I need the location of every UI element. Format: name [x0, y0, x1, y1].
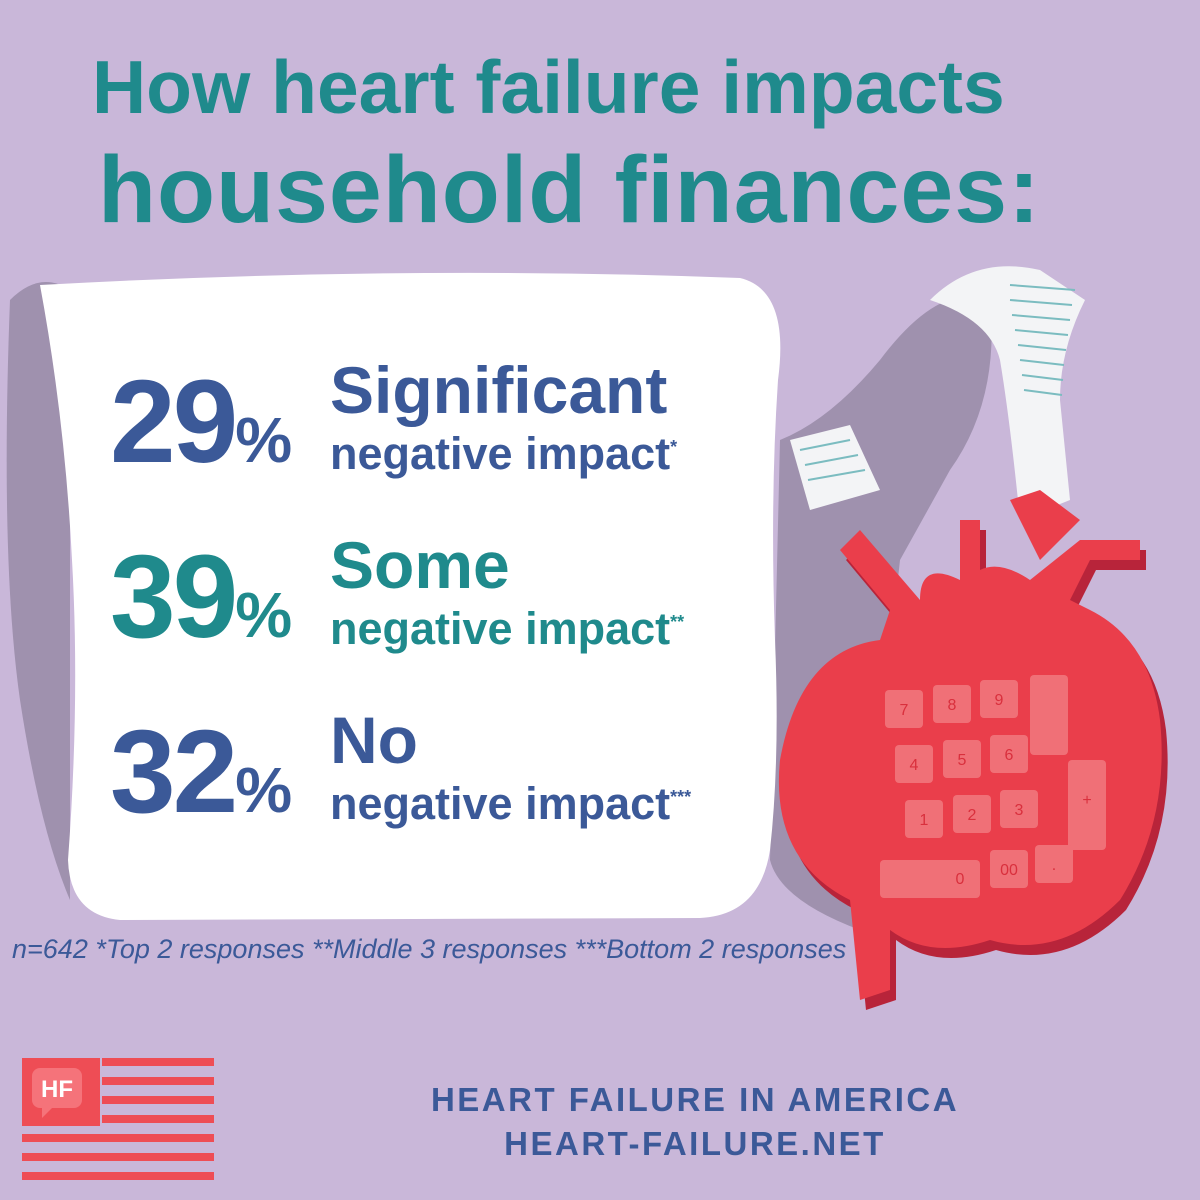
stat: 29%: Significant — [330, 353, 667, 427]
stat: 29% — [110, 353, 678, 488]
icon: heart calculator: 1 — [920, 812, 929, 829]
icon: heart calculator: + — [1082, 792, 1092, 809]
icon: heart calculator — [778, 490, 1168, 1010]
title — [92, 45, 1041, 243]
stat: 39%: 39% — [110, 531, 292, 663]
icon: heart calculator: 00 — [1000, 862, 1018, 879]
ribbon strip — [930, 266, 1085, 520]
stat: 32% — [110, 703, 692, 838]
icon: heart calculator: 6 — [1005, 747, 1014, 764]
shadow ribbon — [7, 282, 70, 900]
stat: 32%: negative impact*** — [330, 778, 691, 829]
icon: heart calculator: 3 — [1015, 802, 1024, 819]
icon: heart calculator: 0 — [956, 871, 965, 888]
icon: heart calculator: 9 — [995, 692, 1004, 709]
footer text — [431, 1081, 959, 1162]
stat: 29%: 29% — [110, 356, 292, 488]
receipt paper illustration — [6, 266, 1085, 927]
logo: HF flag — [22, 1058, 214, 1180]
stat: 32%: No — [330, 703, 418, 777]
stat: 29%: negative impact* — [330, 428, 677, 479]
icon: heart calculator: 4 — [910, 757, 919, 774]
white paper — [40, 273, 780, 920]
footer text: HEART FAILURE IN AMERICA — [431, 1081, 959, 1118]
icon: heart calculator: 8 — [948, 697, 957, 714]
footnote: n=642 *Top 2 responses **Middle 3 responses ***Bottom 2 responses — [12, 934, 846, 964]
title line 1: How heart failure impacts — [92, 45, 1005, 129]
stat: 39%: negative impact** — [330, 603, 684, 654]
icon: heart calculator: 7 — [900, 702, 909, 719]
footer text: HEART-FAILURE.NET — [504, 1125, 886, 1162]
icon: heart calculator: 5 — [958, 752, 967, 769]
stat: 39% — [110, 528, 684, 663]
icon: heart calculator: 2 — [968, 807, 977, 824]
stat: 39%: Some — [330, 528, 510, 602]
stat: 32%: 32% — [110, 706, 292, 838]
title line 2: household finances: — [98, 137, 1041, 243]
icon: heart calculator: . — [1052, 857, 1056, 874]
logo: HF flag: HF — [41, 1076, 73, 1103]
